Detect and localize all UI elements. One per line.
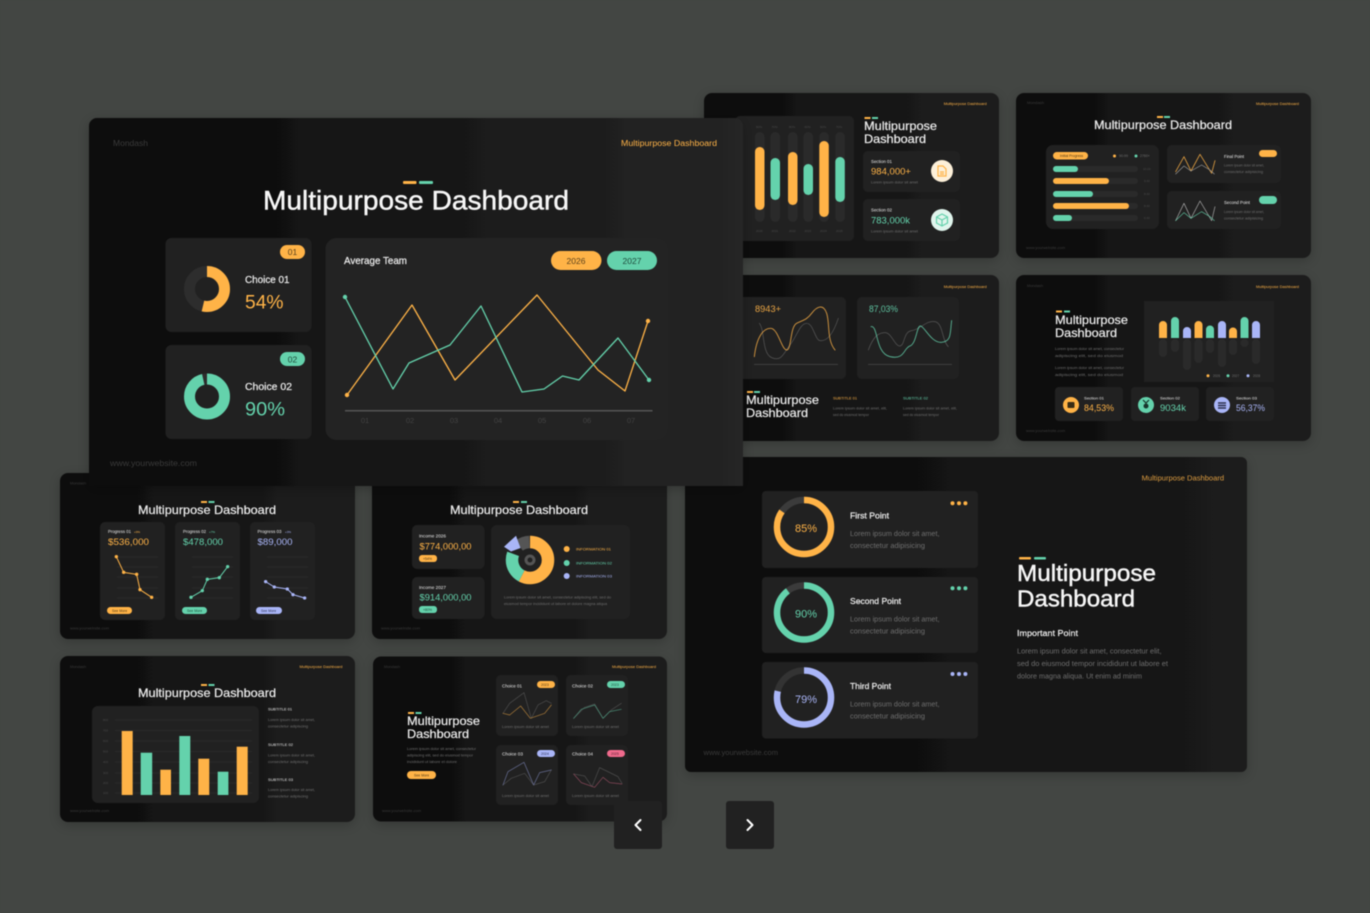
bar chart panel: 2025 <box>836 229 843 233</box>
stat: section 03: Section 03 <box>1236 396 1258 400</box>
slide: vertical bars <box>704 93 999 258</box>
slide: rounded columns: Mondash <box>1027 283 1043 288</box>
bar chart <box>92 706 259 803</box>
card: section 01: Section 01 <box>871 159 892 164</box>
card: income 2026: $774,000,00 <box>420 542 472 552</box>
card: choice 04: Choice 04 <box>572 752 594 756</box>
slide: choice cards: www.yourwebsite.com <box>382 809 421 813</box>
card: choice 01: 2023 <box>541 683 549 687</box>
card: choice 01: Lorem ipsum dolor sit amet <box>502 725 549 729</box>
subtitles: Lorem ipsum dolor sit amet, <box>268 718 315 722</box>
description: Lorem ipsum dolor sit amet, consectetur <box>1055 347 1125 351</box>
card: second point: Second Point <box>850 596 902 606</box>
heading: Multipurpose <box>1055 313 1128 327</box>
description: Lorem ipsum dolor sit amet, consectetur <box>1055 366 1125 370</box>
axis: 03 <box>450 416 458 425</box>
card: income 2027: +80% <box>423 608 432 612</box>
card: section 02: 783,000k <box>871 216 911 226</box>
progress panel: 6.00 <box>1144 216 1150 220</box>
heading: Multipurpose <box>864 119 937 133</box>
card: income 2026 <box>412 525 484 569</box>
heading: Multipurpose <box>407 714 480 728</box>
stat: section 01: Section 01 <box>1084 396 1105 400</box>
slide: column chart: www.yourwebsite.com <box>70 809 109 813</box>
card: first point: Lorem ipsum dolor sit amet, <box>850 531 940 538</box>
slide: choice cards <box>373 656 667 822</box>
slide: income donut: www.yourwebsite.com <box>381 626 420 630</box>
heading: Multipurpose <box>746 393 819 407</box>
brand: Mondash <box>113 138 148 148</box>
stat: section 02: 9034k <box>1160 403 1187 413</box>
line 2026 <box>345 295 650 397</box>
card: income 2027 <box>412 577 484 619</box>
slide: points with rings: www.yourwebsite.com <box>702 748 778 757</box>
card: second point: 90% <box>795 608 817 620</box>
line 2027 <box>343 295 651 392</box>
curve chart 1: 8943+ <box>755 304 781 314</box>
text block: important point: sed do eiusmod tempor incididunt ut labore et <box>1017 661 1168 668</box>
progress panel: 90-99 <box>1119 154 1128 158</box>
curve chart 2: 87,03% <box>869 304 898 314</box>
progress panel: Initial Progress <box>1060 154 1083 158</box>
heading: Dashboard <box>864 132 926 146</box>
bar chart panel: 2022 <box>789 229 796 233</box>
heading: Multipurpose Dashboard <box>138 686 276 700</box>
slide: rounded columns <box>1016 275 1311 441</box>
bar chart: 400 <box>103 760 108 764</box>
stat: section 02: Section 02 <box>1160 396 1181 400</box>
bar chart panel <box>735 116 854 241</box>
card: income 2027: $914,000,00 <box>420 592 472 602</box>
slide: progress line charts: www.yourwebsite.com <box>70 626 109 630</box>
stat: section 03 <box>1206 387 1274 421</box>
donut panel: eiusmod tempor incididunt ut labore et dolore magna aliqua <box>504 602 607 606</box>
card: section 01 <box>863 151 960 192</box>
subtitle 01: SUBTITLE 01 <box>833 396 857 400</box>
heading <box>1017 557 1156 612</box>
slide: rounded columns: Multipurpose Dashboard <box>1256 284 1299 289</box>
column chart <box>1144 301 1274 382</box>
subtitle 02: SUBTITLE 02 <box>903 396 928 400</box>
text block: important point: dolore magna aliqua. Ut enim ad minim <box>1017 674 1142 680</box>
subtitle 02: sed do eiusmod tempor <box>903 413 940 417</box>
bar chart panel: 70% <box>772 125 778 129</box>
card: section 01: 984,000+ <box>871 166 911 176</box>
card: choice 03: Lorem ipsum dolor sit amet <box>502 794 549 798</box>
subtitles: consectetur adipiscing <box>268 724 308 728</box>
card: second point: Lorem ipsum dolor sit amet, <box>1224 210 1264 214</box>
card: third point: 79% <box>795 694 817 706</box>
subtitles: consectetur adipiscing <box>268 794 308 798</box>
subtitles: SUBTITLE 03 <box>268 777 294 782</box>
heading <box>864 117 937 146</box>
card: progress 03: $89,000 <box>258 537 292 548</box>
card: choice 03: 2024 <box>541 752 549 756</box>
bar chart: 200 <box>103 781 108 785</box>
website: www.yourwebsite.com <box>109 458 197 468</box>
axis: 06 <box>583 416 591 425</box>
subtitle 01: Lorem ipsum dolor sit amet, elit, <box>833 406 887 410</box>
slide: vertical bars: Multipurpose Dashboard <box>944 101 987 106</box>
bar chart: 100 <box>103 791 108 795</box>
slide: points with rings: Multipurpose Dashboard <box>1142 474 1224 482</box>
text block: important point: Important Point <box>1017 628 1079 638</box>
card: choice 01: Choice 01 <box>502 684 522 688</box>
heading <box>746 391 819 420</box>
stat: section 01: 84,53% <box>1084 403 1114 413</box>
bar chart panel: 90% <box>820 125 826 129</box>
card: income 2026: +54% <box>423 557 432 561</box>
card: choice 02: 2023 <box>611 683 619 687</box>
description: adipiscing elit, sed do eiusmod <box>1055 373 1123 377</box>
slide: income donut <box>372 473 667 639</box>
card: section 02 <box>863 199 960 241</box>
card: final point: consectetur adipisicing <box>1224 170 1263 174</box>
heading: Dashboard <box>407 727 469 741</box>
curve chart 1 <box>735 297 846 379</box>
donut panel: INFORMATION 02 <box>576 560 613 566</box>
card: first point: consectetur adipisicing <box>850 543 925 550</box>
header label: Multipurpose Dashboard <box>621 139 717 148</box>
bar chart panel: 70% <box>836 125 842 129</box>
chart title: Average Team <box>344 255 407 267</box>
progress panel <box>1046 145 1159 229</box>
card: second point <box>1167 191 1281 229</box>
progress panel: 9.00 <box>1144 179 1150 183</box>
donut panel: Lorem ipsum dolor sit amet, consectetur adipiscing elit, sed do <box>504 596 611 600</box>
slide: choice cards: Multipurpose Dashboard <box>612 664 656 669</box>
slide: column chart: Mondash <box>70 664 86 669</box>
button: next <box>726 801 774 849</box>
card: progress 02: Progress 02 <box>183 529 206 534</box>
card: choice 01: Choice 01 <box>245 274 290 286</box>
axis <box>345 410 652 425</box>
column chart: 2028 <box>1253 374 1260 378</box>
heading: Multipurpose <box>1017 560 1156 586</box>
card: section 01: Lorem ipsum dolor sit amet <box>871 180 918 184</box>
heading: Multipurpose Dashboard <box>138 503 276 517</box>
card: first point: 85% <box>795 523 817 535</box>
stat: section 01 <box>1055 387 1123 421</box>
donut panel <box>491 525 630 619</box>
slide: column chart <box>60 656 355 822</box>
subtitles: Lorem ipsum dolor sit amet, <box>268 788 315 792</box>
card: choice 04: Lorem ipsum dolor sit amet <box>572 794 619 798</box>
card: choice 01 <box>166 238 312 332</box>
axis: 04 <box>494 416 502 425</box>
card: third point: Lorem ipsum dolor sit amet, <box>850 702 940 708</box>
slide: column chart: Multipurpose Dashboard <box>300 664 342 669</box>
card: third point: consectetur adipisicing <box>850 714 925 720</box>
card: third point: Third Point <box>850 681 892 691</box>
subtitle 02 <box>903 396 957 417</box>
donut panel: INFORMATION 03 <box>576 574 613 578</box>
slide: progress line charts <box>60 473 355 639</box>
card: progress 02: $478,000 <box>183 537 223 548</box>
card: progress 03: +3% <box>285 530 291 534</box>
main slide <box>89 118 743 486</box>
line chart panel <box>326 238 668 440</box>
button: previous <box>614 801 662 849</box>
card: choice 02 <box>566 675 628 736</box>
card: progress 01: Progress 01 <box>108 529 131 534</box>
subtitles <box>268 706 315 798</box>
card: choice 01: 01 <box>288 247 297 257</box>
column chart: 2026 <box>1213 374 1220 378</box>
description: incididunt ut labore et dolore <box>407 760 457 764</box>
bar chart: 600 <box>103 739 108 743</box>
axis: 02 <box>406 416 414 425</box>
heading: Multipurpose Dashboard <box>450 503 588 517</box>
slide: choice cards: Mondash <box>384 664 400 669</box>
card: final point <box>1167 145 1281 183</box>
card: choice 01 <box>496 675 558 736</box>
card: choice 02: 90% <box>245 400 285 420</box>
description <box>1055 347 1125 377</box>
progress panel: 10.00 <box>1143 167 1151 171</box>
slide: curve charts: Multipurpose Dashboard <box>944 284 987 289</box>
legend 2027 <box>607 251 657 270</box>
subtitles: SUBTITLE 01 <box>268 706 293 712</box>
card: choice 04: 2025 <box>611 752 619 756</box>
column chart: 2027 <box>1232 374 1239 378</box>
card: second point: consectetur adipisicing <box>850 628 925 636</box>
card: choice 02 <box>166 345 312 439</box>
bar chart: 800 <box>103 718 108 722</box>
legend 2026: 2026 <box>567 256 586 266</box>
description: adipiscing elit, sed do eiusmod <box>1055 354 1123 358</box>
stat: section 03: 56,37% <box>1236 403 1265 413</box>
progress panel: 2760+ <box>1140 154 1150 158</box>
card: progress 02: See More <box>187 609 202 613</box>
card: choice 01: 54% <box>245 292 284 314</box>
slide: horizontal progress: Multipurpose Dashboard <box>1256 101 1299 106</box>
axis: 01 <box>361 416 369 425</box>
card: choice 02: Choice 02 <box>572 684 594 688</box>
slide: progress line charts: Mondash <box>70 480 86 486</box>
card: progress 03: Progress 03 <box>258 529 282 534</box>
card: income 2027: Income 2027 <box>419 585 447 590</box>
card: progress 02: +7% <box>209 530 215 534</box>
bar chart panel: 2024 <box>820 229 827 233</box>
title: Multipurpose Dashboard <box>263 186 569 216</box>
slide: horizontal progress <box>1016 93 1311 258</box>
slide: horizontal progress: Mondash <box>1027 100 1044 105</box>
card: first point <box>762 491 978 568</box>
bar chart panel: 60% <box>804 125 811 129</box>
bar chart: 700 <box>103 728 108 732</box>
card: choice 02: Choice 02 <box>245 381 292 393</box>
subtitles: Lorem ipsum dolor sit amet, <box>268 754 315 758</box>
card: final point: Final Point <box>1224 154 1245 159</box>
card: choice 03: Choice 03 <box>502 752 524 756</box>
bar chart panel: 80% <box>789 125 795 129</box>
slide: points with rings <box>685 457 1247 772</box>
heading: Dashboard <box>746 406 808 420</box>
legend 2027: 2027 <box>623 256 642 266</box>
card: choice 04 <box>566 745 628 805</box>
description: Lorem ipsum dolor sit amet, consectetur <box>407 747 477 751</box>
card: choice 02: Lorem ipsum dolor sit amet <box>572 725 619 729</box>
card: choice 03 <box>496 745 558 805</box>
bar chart: 300 <box>103 771 108 775</box>
heading: Dashboard <box>1017 586 1135 612</box>
axis: 05 <box>538 416 546 425</box>
description: See More <box>414 774 429 778</box>
card: choice 02: 02 <box>288 354 297 364</box>
text block: important point <box>1017 628 1168 680</box>
subtitles: consectetur adipiscing <box>268 760 308 764</box>
bar chart panel: 2021 <box>772 229 779 233</box>
bar chart panel: 2020 <box>756 229 763 233</box>
card: first point: First Point <box>850 510 890 520</box>
progress panel: 8.00 <box>1144 192 1150 196</box>
card: second point: Lorem ipsum dolor sit amet, <box>850 616 940 624</box>
card: progress 01 <box>100 522 165 620</box>
heading: Dashboard <box>1055 326 1117 340</box>
bar chart panel: 90% <box>756 125 762 129</box>
subtitle 02: Lorem ipsum dolor sit amet, elit, <box>903 406 957 410</box>
description: adipiscing elit, sed do eiusmod tempor <box>407 754 474 758</box>
progress panel: 8.00 <box>1144 204 1150 208</box>
curve chart 2 <box>857 297 959 379</box>
card: section 02: Section 02 <box>871 208 892 212</box>
slide: horizontal progress: www.yourwebsite.com <box>1026 246 1065 250</box>
card: final point: Lorem ipsum dolor sit amet, <box>1224 164 1264 168</box>
card: third point <box>762 662 978 738</box>
legend 2026 <box>551 251 602 270</box>
card: second point: Second Point <box>1224 200 1251 205</box>
card: section 02: Lorem ipsum dolor sit amet <box>871 230 918 234</box>
bar chart panel: 2023 <box>804 229 812 233</box>
bar chart: 500 <box>103 750 108 754</box>
card: progress 01: +9% <box>134 530 140 534</box>
text block: important point: Lorem ipsum dolor sit amet, consectetur elit, <box>1017 648 1162 656</box>
slide: rounded columns: www.yourwebsite.com <box>1026 429 1065 433</box>
card: progress 03 <box>250 522 315 620</box>
slide: curve charts <box>704 275 999 441</box>
subtitle 01 <box>833 396 887 417</box>
card: progress 03: See More <box>261 609 276 613</box>
card: progress 01: $536,000 <box>108 537 149 548</box>
heading <box>1055 310 1128 340</box>
card: second point <box>762 577 978 653</box>
axis: 07 <box>627 416 635 425</box>
subtitle 01: sed do eiusmod tempor <box>833 413 870 417</box>
heading <box>407 712 480 741</box>
card: income 2026: Income 2026 <box>419 534 447 538</box>
stat: section 02 <box>1131 387 1199 421</box>
card: progress 01: See More <box>112 609 127 613</box>
card: second point: consectetur adipisicing <box>1224 216 1263 220</box>
donut panel: INFORMATION 01 <box>576 546 612 552</box>
description <box>407 747 477 779</box>
card: progress 02 <box>175 522 240 620</box>
heading: Multipurpose Dashboard <box>1094 118 1232 132</box>
subtitles: SUBTITLE 02 <box>268 742 294 747</box>
